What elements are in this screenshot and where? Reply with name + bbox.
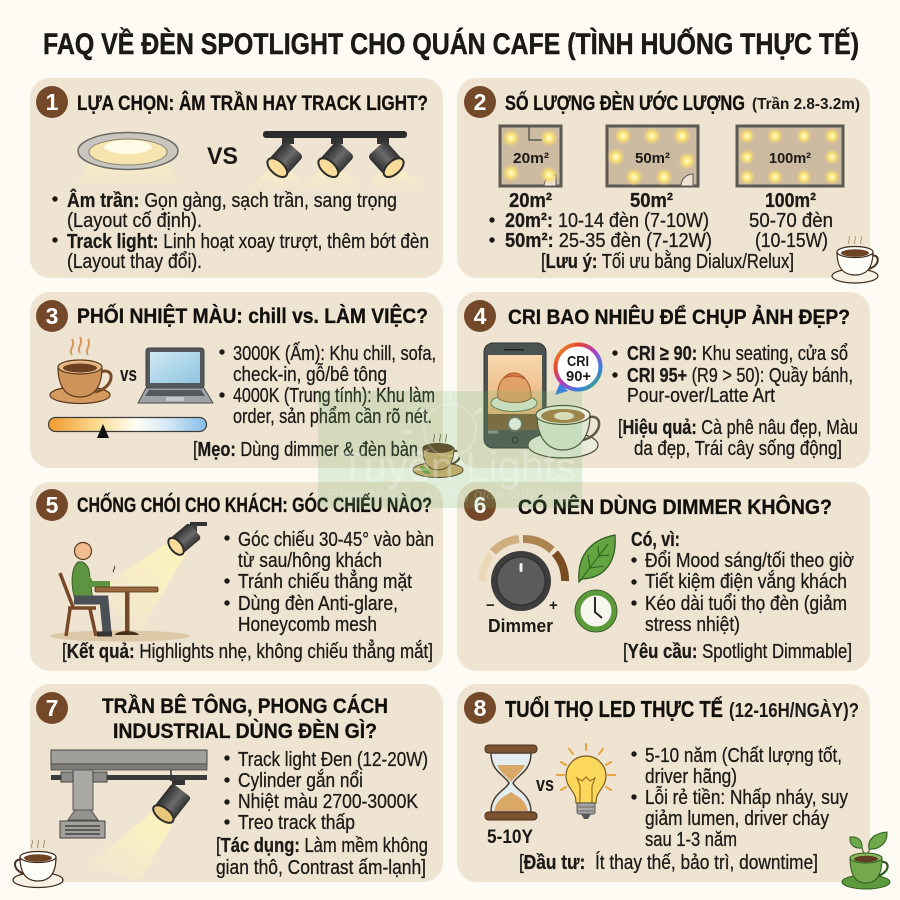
panel 7 heading: [102, 693, 388, 743]
number badge 2: 2: [474, 89, 486, 115]
panel 4 text block: [612, 343, 858, 460]
number badge 5: [36, 489, 68, 521]
panel 2 text block: 50m²: [630, 190, 673, 212]
panel 1 text block: (Layout cố định).: [67, 210, 202, 232]
icon: green cup with plant: [842, 832, 890, 889]
panel 3 text block: [193, 342, 436, 461]
number badge 8: [464, 692, 496, 724]
panel 5 text block: Honeycomb mesh: [238, 614, 377, 636]
panel 5 text block: [Kết quả: Highlights nhẹ, không chiếu thẳng mắt]: [62, 639, 433, 663]
panel 7 text block: [Tác dụng: Làm mềm không: [216, 835, 428, 857]
panel 5: chống chói: [30, 482, 443, 671]
panel 4: CRI: [457, 292, 870, 468]
panel 8 text block: driver hãng): [645, 766, 737, 788]
panel 6 text block: Đổi Mood sáng/tối theo giờ: [645, 550, 854, 572]
panel 2 text block: 20m²: 10-14 đèn (7-10W): [505, 210, 709, 232]
icon: small tan cup with leaf: [413, 434, 463, 478]
icon: dimmer knob: [482, 539, 565, 636]
floor plan 50m2: [607, 126, 698, 186]
panel 6 text block: Có, vì:: [631, 529, 680, 551]
panel 7 heading: INDUSTRIAL DÙNG ĐÈN GÌ?: [113, 718, 377, 743]
panel 1: âm trần hay track light: [30, 78, 443, 278]
number badge 7: [36, 692, 68, 724]
panel 1 text block: Âm trần: Gọn gàng, sạch trần, sang trọng: [67, 188, 397, 212]
number badge 4: 4: [474, 303, 487, 329]
hourglass caption: 5-10Y: [487, 827, 533, 848]
number badge 4: [464, 300, 496, 332]
icon: hourglass: [485, 745, 537, 820]
icon: CRI 90+ speech bubble: [555, 344, 600, 395]
panel 2: số lượng đèn: [457, 78, 878, 283]
number badge 8: 8: [474, 695, 487, 721]
floor plan 20m2: 20m²: [513, 150, 549, 167]
panel 7 text block: Treo track thấp: [238, 812, 355, 834]
icon: dimmer knob: −: [486, 597, 495, 614]
panel 1 text block: Track light: Linh hoạt xoay trượt, thêm bớt đèn: [67, 231, 429, 253]
icon: latte cup: [528, 406, 599, 458]
panel 6 text block: Kéo dài tuổi thọ đèn (giảm: [645, 593, 847, 615]
panel 8 text block: giảm lumen, driver cháy: [645, 808, 829, 830]
panel 2 background: [457, 78, 870, 278]
icon: phone with pastry photo: [484, 343, 546, 448]
panel 7 text block: gian thô, Contrast ấm-lạnh]: [216, 857, 426, 879]
panel 8 heading: TUỔI THỌ LED THỰC TẾ: [505, 695, 723, 722]
panel 2 text block: [489, 190, 833, 273]
panel 4 text block: [Hiệu quả: Cà phê nâu đẹp, Màu: [618, 417, 858, 439]
panel 4 text block: da đẹp, Trái cây sống động]: [634, 438, 842, 460]
panel 1 heading: LỰA CHỌN: ÂM TRẦN HAY TRACK LIGHT?: [77, 90, 428, 115]
panel 7 text block: Cylinder gắn nổi: [238, 769, 363, 792]
panel 8 text block: sau 1-3 năm: [645, 829, 737, 851]
panel 7 text block: Track light Đen (12-20W): [238, 749, 428, 771]
floor plan 100m2: 100m²: [769, 150, 811, 167]
panel 6 heading: CÓ NÊN DÙNG DIMMER KHÔNG?: [518, 494, 832, 519]
panel 8 text block: Lỗi rẻ tiền: Nhấp nháy, suy: [645, 786, 848, 809]
panel 3 text block: 4000K (Trung tính): Khu làm: [233, 385, 435, 407]
panel 2 text block: 20m²: [509, 190, 552, 212]
panel 4 background: [457, 292, 870, 468]
panel 1 text block: [52, 188, 429, 273]
icon: track light with three heads: [246, 131, 432, 190]
panel 2 text block: [Lưu ý: Tối ưu bằng Dialux/Relux]: [541, 250, 794, 273]
panel 4 heading: CRI BAO NHIÊU ĐỂ CHỤP ẢNH ĐẸP?: [508, 304, 850, 329]
number badge 1: [36, 86, 68, 118]
panel 3 heading: PHỐI NHIỆT MÀU: chill vs. LÀM VIỆC?: [77, 302, 428, 328]
panel 2 text block: (10-15W): [755, 230, 828, 252]
panel 6 text block: Tiết kiệm điện vắng khách: [645, 570, 847, 593]
panel 7 heading: TRẦN BÊ TÔNG, PHONG CÁCH: [102, 693, 388, 718]
number badge 6: 6: [474, 492, 486, 518]
panel 2 heading: (Trần 2.8-3.2m): [752, 96, 860, 113]
vs label: vs: [120, 364, 137, 386]
icon: coffee cup: [13, 840, 63, 888]
number badge 3: [36, 300, 68, 332]
colour temperature bar: [48, 418, 206, 438]
icon: coffee cup: [832, 236, 878, 283]
panel 6 background: [457, 482, 870, 671]
panel 8 text block: [Đầu tư: Ít thay thế, bảo trì, downtime]: [519, 851, 818, 874]
panel 4 text block: Pour-over/Latte Art: [627, 385, 775, 407]
panel 2 text block: 100m²: [765, 190, 816, 212]
number badge 6: [464, 489, 496, 521]
number badge 1: 1: [46, 89, 59, 115]
number badge 5: 5: [46, 492, 59, 518]
icon: dimmer knob: Dimmer: [488, 615, 553, 636]
panel 3 background: [30, 292, 443, 468]
floor plan 50m2: 50m²: [635, 150, 670, 167]
vs label: vs: [536, 774, 554, 796]
panel 6 text block: [Yêu cầu: Spotlight Dimmable]: [623, 641, 852, 663]
icon: CRI 90+ speech bubble: CRI: [567, 353, 589, 370]
watermark: Phòng cách · Không gian ánh sáng: [328, 486, 573, 503]
panel 5 text block: [62, 529, 434, 663]
panel 5 background: [30, 482, 443, 671]
panel 8 text block: 5-10 năm (Chất lượng tốt,: [645, 745, 842, 767]
floor plan 100m2: [737, 126, 843, 186]
panel 8: tuổi thọ LED: [457, 684, 890, 889]
panel 1 background: [30, 78, 443, 278]
watermark: Tuyến Lights: [340, 443, 576, 490]
panel 5 heading: CHỐNG CHÓI CHO KHÁCH: GÓC CHIẾU NÀO?: [77, 491, 432, 517]
icon: dimmer knob: +: [549, 597, 558, 614]
panel 7 text block: [216, 749, 428, 879]
icon: warm coffee cup: [50, 337, 111, 404]
panel 3 text block: order, sản phẩm cần rõ nét.: [233, 406, 432, 428]
panel 2 text block: 50-70 đèn: [749, 210, 833, 232]
panel 3 text block: 3000K (Ấm): Khu chill, sofa,: [233, 342, 436, 365]
panel 5 text block: từ sau/hông khách: [238, 550, 382, 572]
number badge 2: [464, 86, 496, 118]
icon: clock: [575, 590, 617, 632]
illustration: customer at table under angled spotlight: [50, 522, 207, 642]
panel 6 text block: [623, 529, 854, 663]
number badge 7: 7: [46, 695, 58, 721]
panel 8 heading: (12-16H/NGÀY)?: [729, 699, 859, 722]
panel 7: trần bê tông: [13, 684, 443, 888]
panel 6 text block: stress nhiệt): [645, 614, 740, 636]
number badge 3: 3: [46, 303, 58, 329]
icon: laptop: [138, 348, 213, 403]
panel 8 background: [457, 684, 870, 882]
panel 3: phối nhiệt màu: [30, 292, 463, 478]
panel 6: dimmer: [457, 482, 870, 671]
panel 2 text block: 50m²: 25-35 đèn (7-12W): [505, 230, 712, 252]
panel 3 text block: [Mẹo: Dùng dimmer & đèn bàn: [193, 439, 418, 461]
watermark: [318, 391, 582, 508]
vs label: VS: [207, 143, 238, 170]
panel 7 text block: Nhiệt màu 2700-3000K: [238, 791, 419, 813]
illustration: concrete ceiling, duct and cylinder track light: [51, 750, 207, 881]
icon: light bulb: [557, 744, 615, 819]
panel 5 text block: Tránh chiếu thẳng mặt: [238, 569, 412, 593]
panel 3 text block: check-in, gỗ/bê tông: [233, 363, 387, 386]
panel 4 text block: CRI ≥ 90: Khu seating, cửa sổ: [627, 343, 848, 365]
panel 7 background: [30, 684, 443, 882]
panel 4 text block: CRI 95+ (R9 > 50): Quầy bánh,: [627, 365, 853, 387]
icon: leaf: [579, 535, 615, 582]
panel 1 text block: (Layout thay đổi).: [67, 251, 202, 273]
panel 5 text block: Dùng đèn Anti-glare,: [238, 593, 398, 615]
floor plan 20m2: [500, 126, 561, 186]
icon: CRI 90+ speech bubble: 90+: [566, 368, 591, 385]
panel 5 text block: Góc chiếu 30-45° vào bàn: [238, 529, 434, 551]
panel 8 text block: [519, 745, 848, 874]
icon: recessed downlight: [72, 132, 184, 188]
panel 2 heading: SỐ LƯỢNG ĐÈN ƯỚC LƯỢNG: [505, 89, 745, 115]
